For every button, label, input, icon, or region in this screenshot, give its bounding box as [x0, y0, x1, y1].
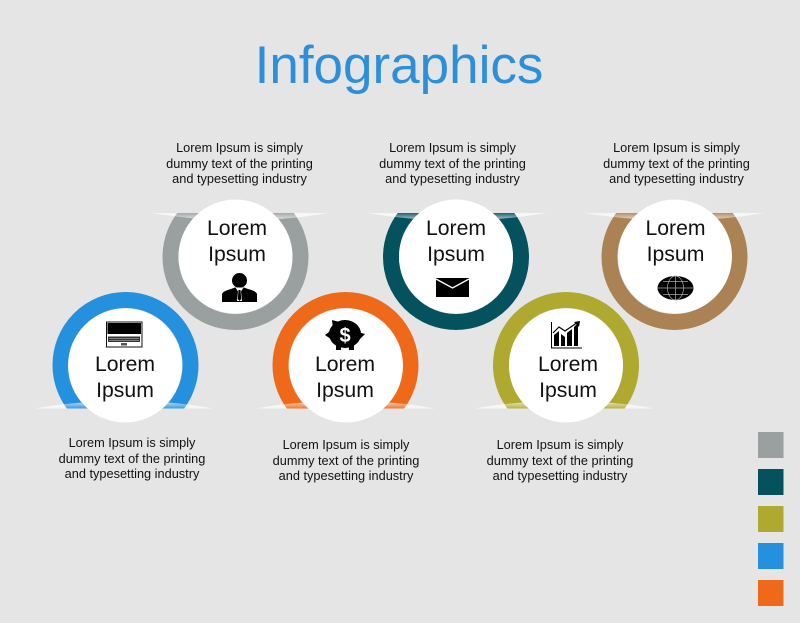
icon: globe: [658, 276, 694, 300]
text block: orange description: [273, 437, 419, 483]
icon: chart: [552, 321, 582, 348]
ring: [610, 192, 740, 322]
text block: brown description: dummy text of the printing: [603, 156, 750, 171]
text block: orange description: Lorem Ipsum is simply: [283, 437, 410, 452]
text block: orange description: and typesetting industry: [279, 468, 414, 483]
text block: teal description: and typesetting industry: [385, 171, 520, 186]
label: Lorem: [95, 353, 155, 376]
text block: olive description: [487, 437, 633, 483]
ring: [280, 300, 410, 430]
panel: gray person circle: [152, 192, 328, 322]
white disc: [509, 308, 623, 422]
text block: olive description: dummy text of the printing: [487, 453, 633, 468]
ring: [170, 192, 300, 322]
reflection base: [585, 213, 764, 220]
text block: gray description: Lorem Ipsum is simply: [176, 140, 304, 155]
panel: teal envelope circle: [368, 192, 547, 322]
reflection base: [368, 213, 547, 220]
text block: gray description: dummy text of the printing: [166, 156, 313, 171]
text block: teal description: [379, 140, 526, 186]
reflection base: [152, 213, 328, 220]
text block: olive description: and typesetting industry: [493, 468, 628, 483]
label: Lorem: [538, 353, 598, 376]
text block: blue description: dummy text of the printing: [59, 451, 205, 466]
text block: blue description: and typesetting industry: [65, 466, 200, 481]
panel: teal envelope circle: Ipsum: [427, 243, 485, 266]
panel: orange piggy circle: Ipsum: [316, 379, 374, 402]
text block: gray description: and typesetting industry: [172, 171, 307, 186]
white disc: [618, 200, 732, 314]
ring: [60, 300, 190, 430]
reflection: [475, 401, 654, 408]
title: Infographics: [255, 36, 543, 95]
reflection: [35, 401, 213, 408]
panel: blue laptop circle: [35, 300, 213, 430]
reflection: [152, 213, 328, 220]
text block: brown description: [603, 140, 750, 186]
text block: olive description: Lorem Ipsum is simply: [497, 437, 624, 452]
panel: olive chart circle: [475, 300, 654, 430]
reflection base: [35, 401, 213, 408]
label: Lorem: [426, 217, 486, 240]
panel: blue laptop circle: Ipsum: [96, 379, 154, 402]
icon: laptop: [106, 322, 142, 347]
icon: piggy bank: [325, 320, 365, 350]
text block: orange description: dummy text of the printing: [273, 453, 419, 468]
white disc: [399, 200, 513, 314]
legend swatches: [758, 432, 784, 606]
white disc: [68, 308, 182, 422]
reflection: [368, 213, 547, 220]
ring: [391, 192, 521, 322]
text block: gray description: [166, 140, 313, 186]
panel: orange piggy circle: [256, 300, 435, 430]
text block: brown description: and typesetting industry: [609, 171, 744, 186]
reflection: [585, 213, 764, 220]
panel: olive chart circle: Ipsum: [539, 379, 597, 402]
panel: gray person circle: Ipsum: [208, 243, 266, 266]
text block: teal description: dummy text of the printing: [379, 156, 526, 171]
icon: person: [222, 273, 257, 302]
text block: brown description: Lorem Ipsum is simply: [613, 140, 741, 155]
label: Lorem: [315, 353, 375, 376]
icon: envelope: [436, 278, 469, 297]
text block: blue description: Lorem Ipsum is simply: [69, 435, 196, 450]
label: Lorem: [645, 217, 706, 240]
panel: brown globe circle: Ipsum: [647, 243, 704, 266]
text block: blue description: [59, 435, 205, 481]
label: Lorem: [207, 217, 267, 240]
icon: piggy bank: $: [339, 325, 351, 347]
ring: [501, 300, 631, 430]
reflection: [256, 401, 435, 408]
white disc: [178, 200, 292, 314]
panel: brown globe circle: [585, 192, 764, 322]
reflection base: [256, 401, 435, 408]
white disc: [289, 308, 403, 422]
reflection base: [475, 401, 654, 408]
text block: teal description: Lorem Ipsum is simply: [389, 140, 517, 155]
